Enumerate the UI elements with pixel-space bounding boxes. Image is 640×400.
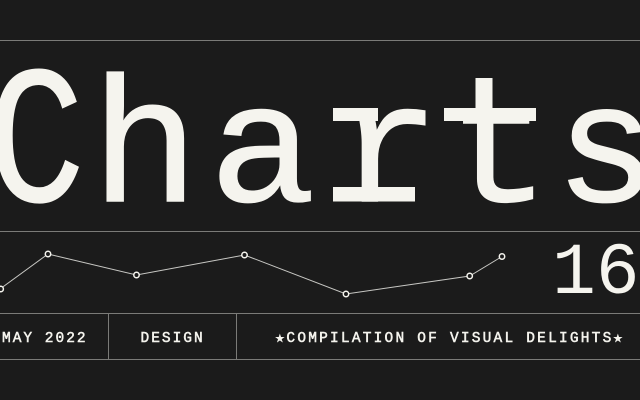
line chart [0,251,505,297]
category label: DESIGN [140,331,205,347]
tagline: ★COMPILATION OF VISUAL DELIGHTS★ [276,331,624,347]
title [0,68,640,204]
infographic canvas [0,40,640,360]
title: h [91,53,199,255]
date label: MAY 2022 [2,331,88,347]
title: t [448,60,550,253]
title: a [209,61,316,253]
issue number: 16 [552,232,640,315]
title: r [338,60,440,253]
